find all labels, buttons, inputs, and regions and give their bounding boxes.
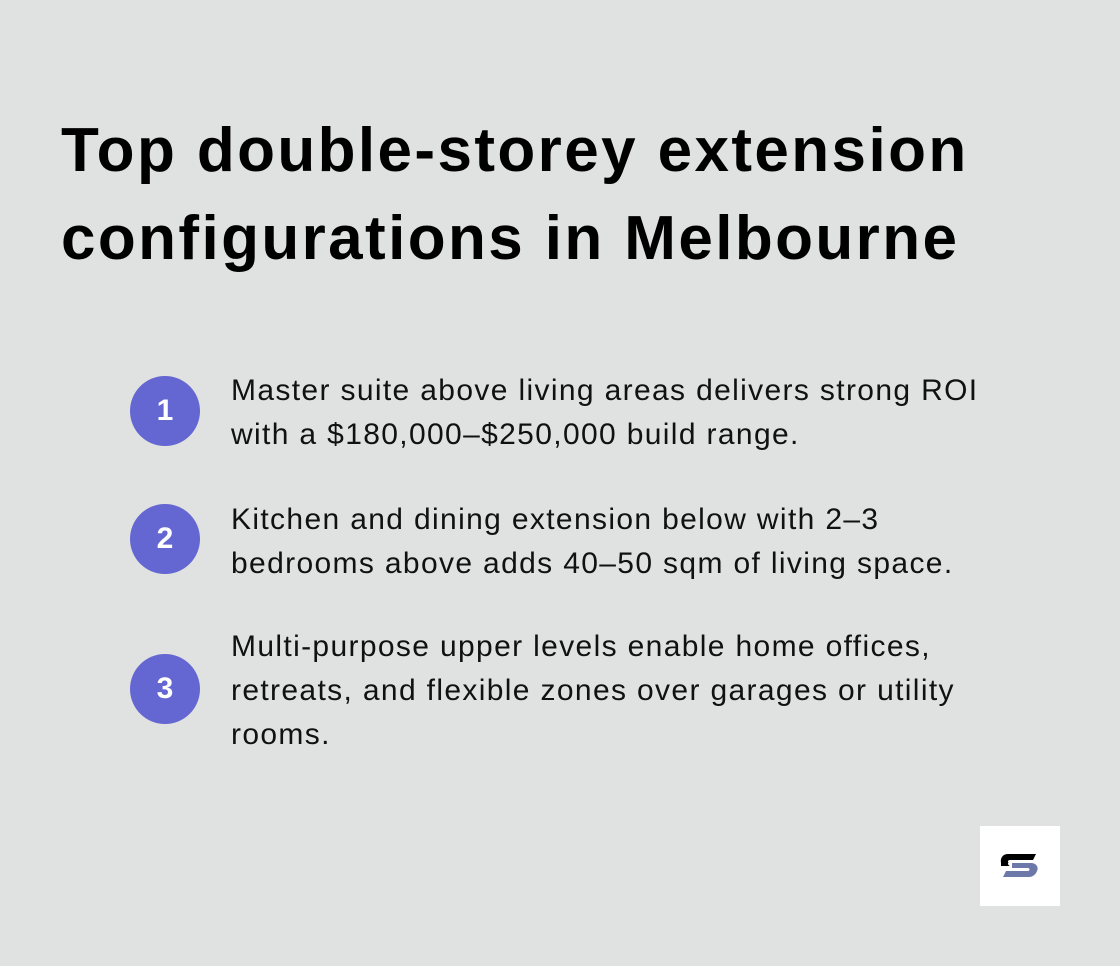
icon: number 2: 2 [157, 522, 173, 555]
title: configurations in Melbourne [61, 204, 959, 273]
icon: number 3 [130, 654, 200, 724]
text 2: Kitchen and dining extension below with 2–3 [231, 503, 879, 536]
item 3 [130, 630, 955, 751]
text 1 [231, 374, 978, 451]
icon: number 1 [130, 376, 200, 446]
icon: number 3: 3 [157, 672, 173, 705]
text 3: Multi-purpose upper levels enable home offices, [231, 630, 931, 663]
text 3: rooms. [231, 718, 331, 751]
text 2 [231, 503, 954, 580]
logo [980, 826, 1060, 906]
item 1 [130, 374, 978, 451]
icon: number 2 [130, 504, 200, 574]
text 1: Master suite above living areas delivers strong ROI [231, 374, 978, 407]
text 2: bedrooms above adds 40–50 sqm of living space. [231, 547, 954, 580]
item 2 [130, 503, 954, 580]
text 3 [231, 630, 955, 751]
icon: number 1: 1 [157, 394, 173, 427]
text 1: with a $180,000–$250,000 build range. [231, 418, 800, 451]
title [61, 116, 969, 273]
text 3: retreats, and flexible zones over garages or utility [231, 674, 955, 707]
title: Top double-storey extension [61, 116, 969, 185]
